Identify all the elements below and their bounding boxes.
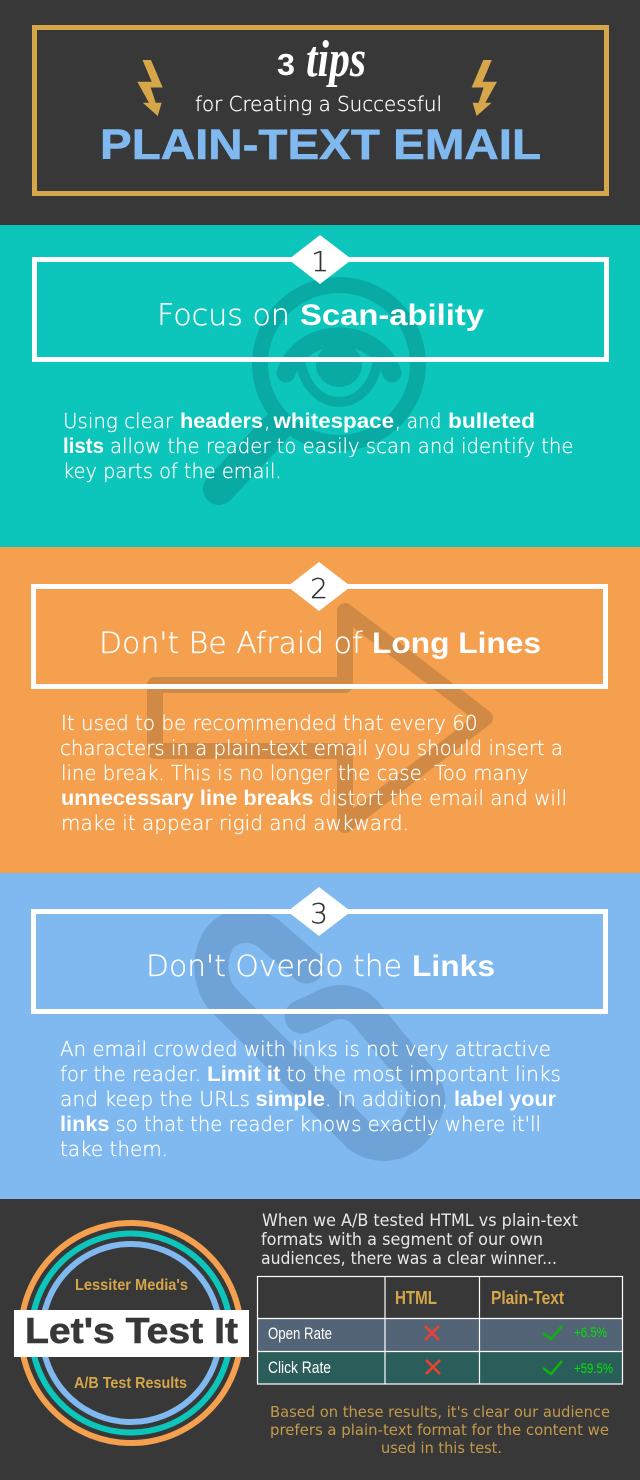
- tip 3 body text: An email crowded with links is not very attractive: [60, 1037, 551, 1061]
- tip 3 body text: take them.: [60, 1137, 168, 1161]
- tip 1 body text: key parts of the email.: [63, 459, 282, 483]
- row label: click rate: Click Rate: [268, 1358, 331, 1377]
- tip 3 heading: Don't Overdo the: [146, 949, 402, 983]
- intro text: [261, 1211, 579, 1268]
- icon: magnifier with eye watermark: [219, 285, 418, 489]
- intro text: formats with a segment of our own: [261, 1230, 543, 1249]
- panel: tip 1 scan-ability: [0, 225, 640, 547]
- tip 3 body text: simple: [256, 1088, 325, 1111]
- column header: HTML: HTML: [395, 1288, 437, 1308]
- tip 3 body text: links: [60, 1113, 110, 1136]
- badge: let's test it: Let's Test It: [25, 1310, 238, 1351]
- tip 1 body text: Using clear: [63, 409, 174, 433]
- results table: [258, 1276, 622, 1384]
- intro text: When we A/B tested HTML vs plain-text: [262, 1211, 579, 1230]
- conclusion text: used in this test.: [381, 1439, 502, 1457]
- tip 1 body text: whitespace: [272, 410, 394, 433]
- icon: open rate check: [543, 1326, 562, 1339]
- number badge 2: [288, 562, 351, 611]
- heading: plain-text email: PLAIN-TEXT EMAIL: [100, 121, 541, 169]
- tip 2 body text: It used to be recommended that every 60: [61, 711, 478, 735]
- tip 1 body text: ,: [264, 409, 271, 433]
- tip 1 body text: lists: [63, 435, 104, 458]
- row label: open rate: Open Rate: [268, 1324, 332, 1343]
- heading: 3 tips: [277, 31, 366, 88]
- tip 2 body text: characters in a plain-text email you should insert a: [60, 736, 563, 760]
- badge: let's test it: Lessiter Media's: [75, 1277, 188, 1294]
- tip 2 body text: line break. This is no longer the case. Too many: [61, 761, 528, 785]
- heading: 3 tips: tips: [306, 31, 366, 88]
- intro text: audiences, there was a clear winner...: [261, 1249, 557, 1268]
- row: open rate background: [258, 1318, 622, 1352]
- tip 1 body text: allow the reader to easily scan and identify the: [110, 434, 574, 458]
- conclusion text: Based on these results, it's clear our audience: [270, 1403, 610, 1421]
- tip 3 body text: so that the reader knows exactly where it'll: [116, 1112, 541, 1136]
- tip 1 frame: [34, 260, 606, 360]
- heading: for creating a successful: for Creating a Successful: [195, 92, 442, 116]
- badge: let's test it: A/B Test Results: [74, 1375, 187, 1392]
- tip 1 heading: Focus on: [157, 298, 290, 332]
- tip 1 heading: Scan-ability: [300, 299, 484, 332]
- tip 2 body text: make it appear rigid and awkward.: [61, 811, 409, 835]
- tip 3 body text: and keep the URLs: [60, 1087, 250, 1111]
- tip 1 body text: , and: [395, 409, 442, 433]
- tip 3 body text: . In addition,: [325, 1087, 448, 1111]
- tip 2 frame: [34, 586, 606, 686]
- tip 3 body text: to the most important links: [286, 1062, 561, 1086]
- column header: plain-text: Plain-Text: [491, 1288, 564, 1308]
- icon: left lightning bolt: [137, 60, 163, 116]
- conclusion text: [270, 1403, 610, 1457]
- value: +6.5%: +6.5%: [574, 1324, 607, 1340]
- number badge 3: [288, 887, 351, 936]
- tip 1 heading: [157, 298, 484, 332]
- icon: chain link watermark: [211, 926, 428, 1144]
- tip 2 heading: Don't Be Afraid of: [99, 626, 363, 660]
- tip 1 body text: headers: [180, 410, 263, 433]
- panel: tip 2 long lines: [0, 547, 640, 873]
- icon: click rate cross: [426, 1360, 440, 1374]
- icon: arrow watermark: [155, 611, 485, 825]
- heading: 3 tips: 3: [277, 47, 295, 82]
- value: +59.5%: +59.5%: [574, 1360, 613, 1376]
- row: click rate background: [258, 1352, 622, 1384]
- icon: open rate cross: [425, 1326, 439, 1340]
- icon: click rate check: [543, 1361, 562, 1374]
- tip 3 frame: [34, 912, 606, 1012]
- tip 2 heading: Long Lines: [372, 627, 541, 660]
- icon: right lightning bolt: [472, 60, 497, 116]
- tip 3 body text: [60, 1037, 561, 1161]
- header frame: [34, 28, 606, 194]
- tip 3 body text: Limit it: [207, 1063, 281, 1086]
- panel: tip 3 links: [0, 873, 640, 1199]
- number badge 2: 2: [310, 572, 328, 605]
- tip 2 body text: [60, 711, 567, 835]
- tip 3 body text: for the reader.: [60, 1062, 201, 1086]
- tip 1 body text: [63, 409, 574, 483]
- tip 2 body text: distort the email and will: [319, 786, 567, 810]
- tip 3 body text: label your: [454, 1088, 556, 1111]
- tip 3 heading: Links: [412, 950, 495, 983]
- number badge 1: [288, 235, 352, 284]
- number badge 3: 3: [310, 897, 328, 930]
- panel: A/B test results: [0, 1199, 640, 1480]
- number badge 1: 1: [311, 245, 329, 278]
- tip 2 body text: unnecessary line breaks: [61, 787, 314, 810]
- badge: let's test it: [14, 1223, 249, 1443]
- tip 2 heading: [99, 626, 541, 660]
- panel: header: [0, 0, 640, 225]
- conclusion text: prefers a plain-text format for the content we: [270, 1421, 609, 1439]
- tip 1 body text: bulleted: [448, 410, 535, 433]
